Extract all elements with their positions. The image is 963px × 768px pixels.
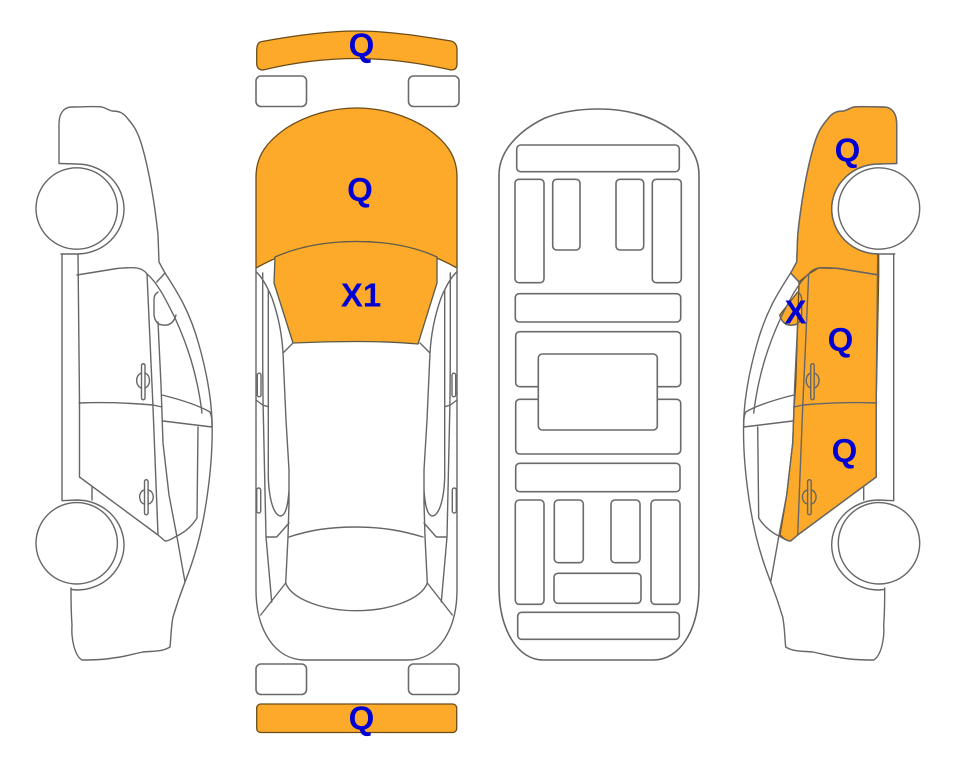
door handles xyxy=(257,373,456,513)
front left lamp xyxy=(256,76,306,106)
windshield panel (damaged) xyxy=(274,242,437,344)
rear window xyxy=(286,527,427,611)
front right lamp xyxy=(408,76,459,106)
side mirror (damaged) xyxy=(780,292,802,325)
rear bumper panel (damaged) xyxy=(257,704,457,732)
label Q front door: Q xyxy=(828,321,853,358)
left side view of car xyxy=(36,107,212,660)
rear right lamp xyxy=(408,664,459,694)
hood panel (damaged) xyxy=(256,108,457,268)
left side lines xyxy=(256,272,293,615)
underbody outline xyxy=(499,109,699,660)
front fender panel (damaged) xyxy=(791,107,897,282)
doors panel (damaged) xyxy=(780,268,879,541)
label X1 windshield: X1 xyxy=(341,276,381,314)
rear left lamp xyxy=(256,664,306,694)
right side lines xyxy=(420,272,457,615)
right side view of car with damaged panels xyxy=(744,107,920,660)
underbody panels xyxy=(515,145,681,639)
label Q front bumper: Q xyxy=(349,26,374,64)
label Q hood: Q xyxy=(347,171,373,208)
front bumper panel (damaged) xyxy=(257,31,457,70)
top view of car xyxy=(256,31,459,732)
body outline xyxy=(256,268,457,660)
label Q rear door: Q xyxy=(832,432,857,469)
label Q fender: Q xyxy=(835,132,860,168)
underside view of car xyxy=(499,109,699,660)
label Q rear bumper: Q xyxy=(349,700,374,736)
label X mirror: X xyxy=(784,294,807,330)
